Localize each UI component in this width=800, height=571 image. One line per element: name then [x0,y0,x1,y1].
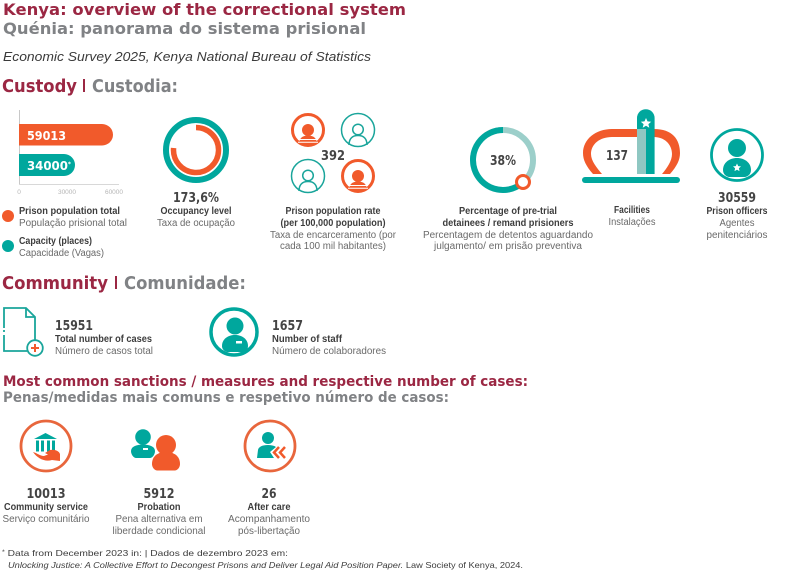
icon: prisoner orange bottom [342,160,374,192]
footnote: Data from December 2023 in: | Dados de dezembro 2023 em: [5,548,288,558]
heading: community: Community [2,273,108,294]
heading: sanctions: Penas/medidas mais comuns e respetivo número de casos: [3,390,449,406]
icon: after care [245,421,295,471]
after care text: pós-libertação [238,526,300,537]
bar: prison population [19,124,113,146]
prison officers text: penitenciários [706,230,768,241]
probation text: Probation [138,502,180,513]
after care text [228,487,310,537]
axis labels: 60000 [105,189,123,196]
heading: sanctions [3,374,528,406]
icon: facilities [582,109,680,183]
footnote [2,548,523,570]
pretrial text: detainees / remand prisioners [442,218,574,229]
legend: Capacidade (Vagas) [19,248,104,259]
pretrial text [423,206,593,252]
probation text [112,487,206,537]
probation text: Pena alternativa em [116,514,202,525]
prison rate text: Taxa de encarceramento (por [270,230,397,241]
axis labels [17,189,123,196]
facilities text [608,205,656,228]
icon: probation [131,429,180,470]
cases text: Número de casos total [55,346,153,357]
prison rate text: (per 100,000 population) [280,218,386,229]
icon: prisoner orange top [292,114,324,146]
footnote: * [2,550,6,556]
probation text: 5912 [144,487,174,502]
title: Kenya: overview of the correctional system [3,0,406,19]
pretrial text: Percentage of pre-trial [459,206,557,217]
occupancy text: Occupancy level [160,206,232,217]
facilities text: Instalações [608,217,656,228]
heading: community [2,273,246,294]
bar: capacity [19,154,75,176]
pretrial value: 38% [490,154,516,169]
community service text: Serviço comunitário [2,514,90,525]
pretrial donut [473,130,533,190]
prison rate number: 392 [321,149,345,164]
after care text: Acompanhamento [228,514,310,525]
cases text: 15951 [55,319,93,334]
community service text [2,487,90,525]
prison rate text [270,206,397,252]
prison officers text [706,191,768,241]
community service text: 10013 [26,487,66,502]
source line: Economic Survey 2025, Kenya National Bureau of Statistics [3,50,371,64]
facilities value: 137 [606,149,628,164]
prison officers text: Prison officers [706,206,768,217]
prison rate text: cada 100 mil habitantes) [280,241,386,252]
occupancy text [157,191,235,229]
bar value: capacity: 34000 [27,159,69,173]
axis labels: 0 [17,189,21,196]
heading: sanctions: Most common sanctions / measures and respective number of cases: [3,374,528,390]
heading: custody: Custodia: [92,76,178,97]
heading: community: Comunidade: [124,273,246,294]
cases text: Total number of cases [55,334,152,345]
bar value: population: 59013 [27,129,66,143]
legend [2,206,127,259]
prison rate text: Prison population rate [286,206,381,217]
pretrial text: Percentagem de detentos aguardando [423,230,593,241]
occupancy text: Taxa de ocupação [157,218,235,229]
legend: Prison population total [19,206,120,217]
cases text [55,319,153,357]
probation text: liberdade condicional [112,526,206,537]
icon: community service [21,421,71,471]
occupancy donut [166,120,226,180]
footnote: Unlocking Justice: A Collective Effort to Decongest Prisons and Deliver Legal Aid Position Paper. Law Society of Kenya, 2024. [8,560,523,570]
community service text: Community service [4,502,88,513]
legend: População prisional total [19,218,127,229]
after care text: After care [248,502,291,513]
prison officers text: Agentes [720,218,754,229]
title [3,0,406,38]
staff text: Number of staff [272,334,343,345]
icon: document plus [4,308,43,356]
prison officers text: 30559 [718,191,756,206]
pretrial text: julgamento/ em prisão preventiva [433,241,582,252]
legend: Capacity (places) [19,236,92,247]
occupancy text: 173,6% [173,191,219,206]
staff text [272,319,386,357]
facilities text: Facilities [614,205,650,216]
title: Quénia: panorama do sistema prisional [3,19,366,38]
icon: person teal top [342,114,374,146]
after care text: 26 [262,487,276,502]
bar chart: population vs capacity [17,110,123,196]
bar value: capacity: * [68,161,72,168]
icon: prison officer [712,130,762,180]
axis labels: 30000 [58,189,76,196]
heading: custody: Custody [2,76,77,97]
staff text: Número de colaboradores [272,346,386,357]
icon: staff [211,309,257,355]
icon: person teal bottom [292,160,324,192]
staff text: 1657 [272,319,303,334]
heading: custody [2,76,178,97]
